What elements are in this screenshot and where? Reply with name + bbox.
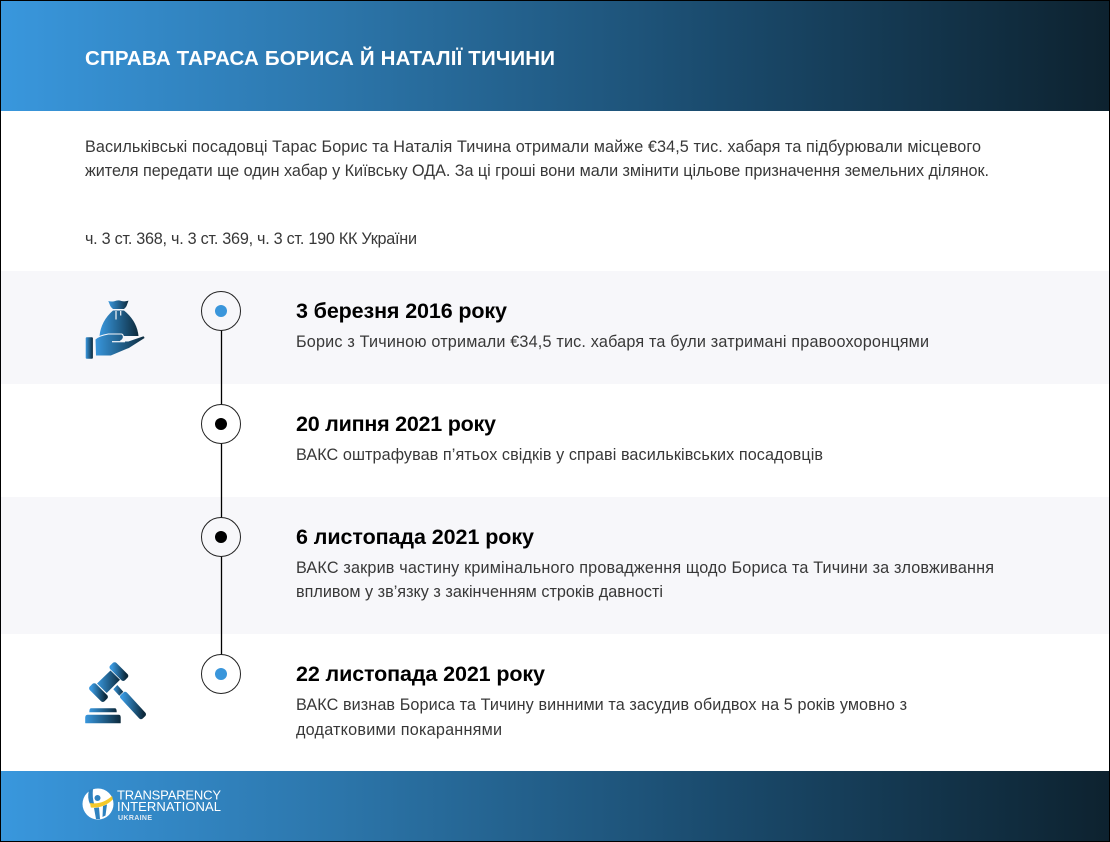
description 4: додатковими покараннями <box>296 721 502 739</box>
description 3: ВАКС закрив частину кримінального провадження щодо Бориса та Тичини за зловживання <box>296 559 994 577</box>
timeline node 3 <box>202 518 240 556</box>
legal articles: ч. 3 ст. 368, ч. 3 ст. 369, ч. 3 ст. 190 КК України <box>85 230 417 248</box>
date 1: 3 березня 2016 року <box>296 299 507 323</box>
description 3 <box>296 559 994 601</box>
icon: money bag in hand <box>86 300 145 359</box>
intro text <box>85 138 989 180</box>
row band 3 <box>1 497 1109 634</box>
description 3: впливом у зв’язку з закінченням строків давності <box>296 583 663 601</box>
timeline node 1 <box>202 292 240 330</box>
logo: Transparency International Ukraine: TRANSPARENCY <box>117 788 221 802</box>
title: СПРАВА ТАРАСА БОРИСА Й НАТАЛІЇ ТИЧИНИ <box>85 46 555 70</box>
intro text: Васильківські посадовці Тарас Борис та Наталія Тичина отримали майже €34,5 тис. хабаря та підбурювали місцевого <box>85 138 981 156</box>
logo: Transparency International Ukraine <box>82 788 221 822</box>
description 2: ВАКС оштрафував п’ятьох свідків у справі васильківських посадовців <box>296 446 823 464</box>
icon: judge gavel <box>85 665 144 723</box>
intro text: жителя передати ще один хабар у Київську ОДА. За ці гроші вони мали змінити цільове призначення земельних ділянок. <box>85 162 989 180</box>
footer band <box>1 771 1109 841</box>
date 3: 6 листопада 2021 року <box>296 525 534 549</box>
date 4: 22 листопада 2021 року <box>296 662 545 686</box>
header band <box>1 1 1109 111</box>
logo: Transparency International Ukraine: INTERNATIONAL <box>117 799 221 814</box>
timeline line <box>220 330 222 655</box>
timeline node 2 <box>202 404 240 444</box>
description 4: ВАКС визнав Бориса та Тичину винними та засудив обидвох на 5 років умовно з <box>296 696 907 714</box>
description 4 <box>296 696 907 739</box>
date 2: 20 липня 2021 року <box>296 412 496 436</box>
timeline node 4 <box>202 654 240 694</box>
row band 1 <box>1 271 1109 384</box>
logo: Transparency International Ukraine: UKRAINE <box>118 815 152 822</box>
description 1: Борис з Тичиною отримали €34,5 тис. хабаря та були затримані правоохоронцями <box>296 333 929 351</box>
